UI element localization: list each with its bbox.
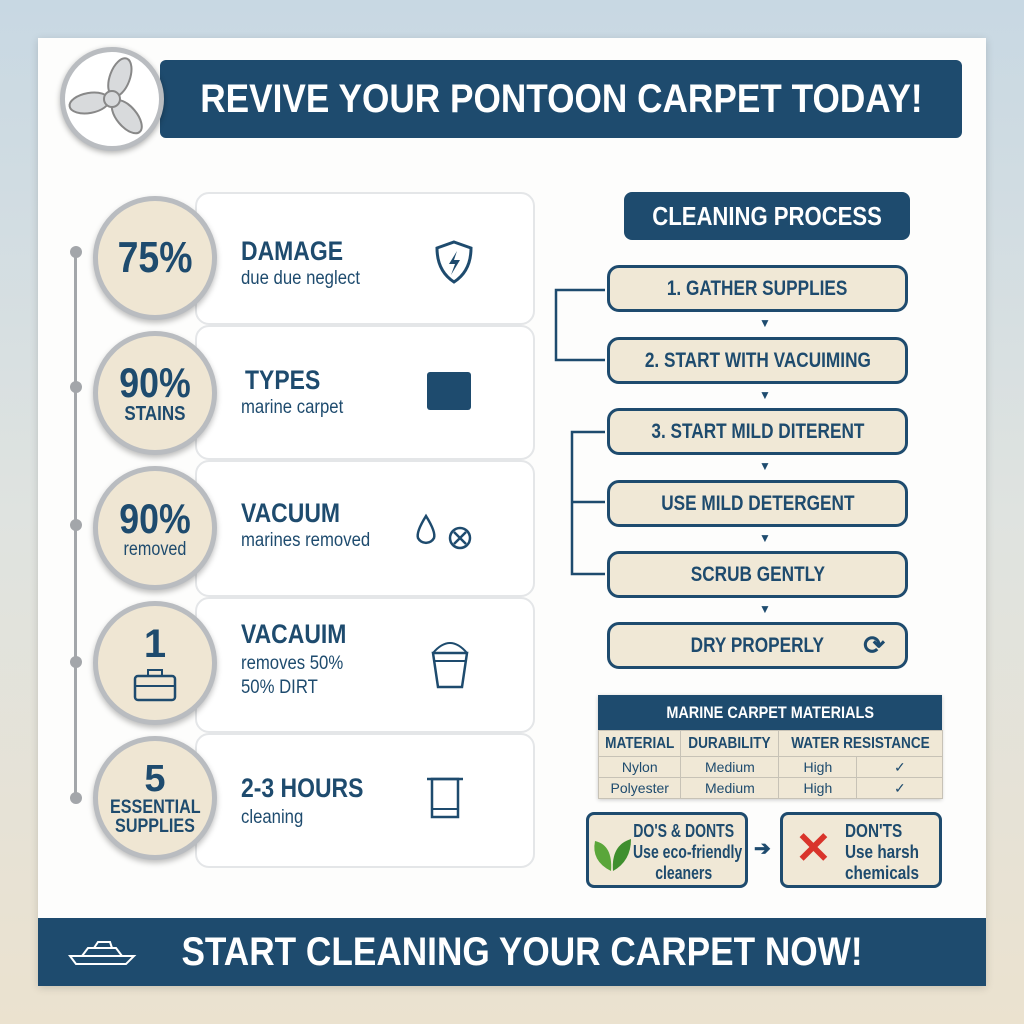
callout: donts [780, 812, 942, 888]
callout: dos: DO'S & DONTS [633, 821, 734, 841]
text: ▼ [759, 459, 771, 473]
callout: donts: DON'TS [845, 821, 902, 841]
flow connectors [554, 288, 605, 576]
table: marine carpet materials: Polyester [611, 780, 669, 796]
table: marine carpet materials: Medium [705, 780, 755, 796]
table: marine carpet materials: DURABILITY [689, 734, 771, 752]
stat circle 5: ESSENTIAL [110, 797, 200, 818]
stat circle 90% removed: removed [124, 538, 186, 560]
callout: dos: Use eco-friendly [633, 842, 742, 862]
title banner [160, 60, 962, 138]
stat circle 5: 5 [144, 758, 166, 800]
icon: boat [68, 941, 136, 965]
stat circle 75%: 75% [118, 233, 192, 282]
panel: types: marine carpet [241, 397, 343, 418]
panel: vacuim [195, 597, 535, 733]
icon: carpet [427, 372, 471, 410]
icon: towel [427, 778, 463, 818]
stat circle 90% stains: 90% [119, 359, 191, 406]
table: marine carpet materials: High [803, 780, 832, 796]
icon: shield [436, 240, 472, 284]
panel: vacuum [195, 460, 535, 597]
panel: 75% damage: DAMAGE [241, 236, 343, 266]
step 1: 1. GATHER SUPPLIES [667, 276, 848, 300]
step 5: SCRUB GENTLY [690, 562, 825, 586]
panel: vacuum: marines removed [241, 530, 370, 551]
step 3 [607, 408, 908, 455]
text: ▼ [759, 602, 771, 616]
text: ▼ [759, 531, 771, 545]
stat circle 90% removed: 90% [119, 494, 191, 542]
table: marine carpet materials: Medium [705, 759, 755, 775]
step 2 [607, 337, 908, 384]
panel: 75% damage [195, 192, 535, 325]
footer banner [38, 918, 986, 986]
table: marine carpet materials: Nylon [622, 759, 658, 775]
icon: bucket [432, 642, 468, 688]
stat circle 5: SUPPLIES [115, 816, 195, 837]
heading: cleaning process [624, 192, 910, 240]
arrow: ➔ [754, 838, 771, 860]
step 6 [607, 622, 908, 669]
callout: dos: cleaners [655, 863, 712, 883]
panel: hours: 2-3 HOURS [241, 773, 363, 803]
callout: dos [586, 812, 748, 888]
table: marine carpet materials: ✓ [894, 758, 906, 774]
step 6: DRY PROPERLY [691, 634, 824, 656]
icon: case [134, 669, 176, 702]
title banner: REVIVE YOUR PONTOON CARPET TODAY! [200, 76, 922, 120]
footer banner: START CLEANING YOUR CARPET NOW! [181, 930, 863, 974]
panel: 75% damage: due due neglect [241, 268, 360, 289]
icon: drop and x [416, 514, 472, 550]
stat circle 90% stains [93, 331, 217, 455]
stat circle 1: 1 [144, 622, 166, 666]
panel: vacuim: 50% DIRT [241, 677, 318, 698]
stat circle 75% [93, 196, 217, 320]
callout: donts: Use harsh [845, 842, 919, 862]
stat circle 90% removed [93, 466, 217, 590]
timeline line [74, 252, 77, 800]
icon: fan [60, 47, 164, 151]
panel: vacuim: removes 50% [241, 653, 343, 674]
step 4: USE MILD DETERGENT [661, 492, 854, 514]
step 6: ⟳ [863, 630, 885, 660]
callout: donts: chemicals [845, 863, 919, 883]
table: marine carpet materials [598, 695, 942, 799]
text: ▼ [759, 316, 771, 330]
step 3: 3. START MILD DITERENT [651, 420, 864, 442]
icon: leaf [594, 839, 631, 871]
step 1 [607, 265, 908, 312]
panel: hours: cleaning [241, 807, 303, 828]
table: marine carpet materials: High [803, 759, 832, 775]
text: ▼ [759, 388, 771, 402]
panel: types [195, 325, 535, 460]
icon: red x: ✕ [795, 824, 832, 873]
table: marine carpet materials: MARINE CARPET MATERIALS [666, 702, 874, 722]
table: marine carpet materials: MATERIAL [605, 734, 674, 752]
stat circle 5 [93, 736, 217, 860]
table: marine carpet materials: ✓ [894, 780, 906, 796]
stat circle 90% stains: STAINS [124, 403, 186, 425]
heading: cleaning process: CLEANING PROCESS [652, 200, 882, 230]
step 4 [607, 480, 908, 527]
table: marine carpet materials: WATER RESISTANCE [792, 734, 930, 752]
panel: vacuim: VACAUIM [241, 619, 346, 649]
step 2: 2. START WITH VACUIMING [644, 348, 871, 372]
stat circle 1 [93, 601, 217, 725]
step 5 [607, 551, 908, 598]
panel: vacuum: VACUUM [241, 498, 340, 528]
panel: types: TYPES [245, 365, 320, 395]
panel: hours [195, 733, 535, 868]
